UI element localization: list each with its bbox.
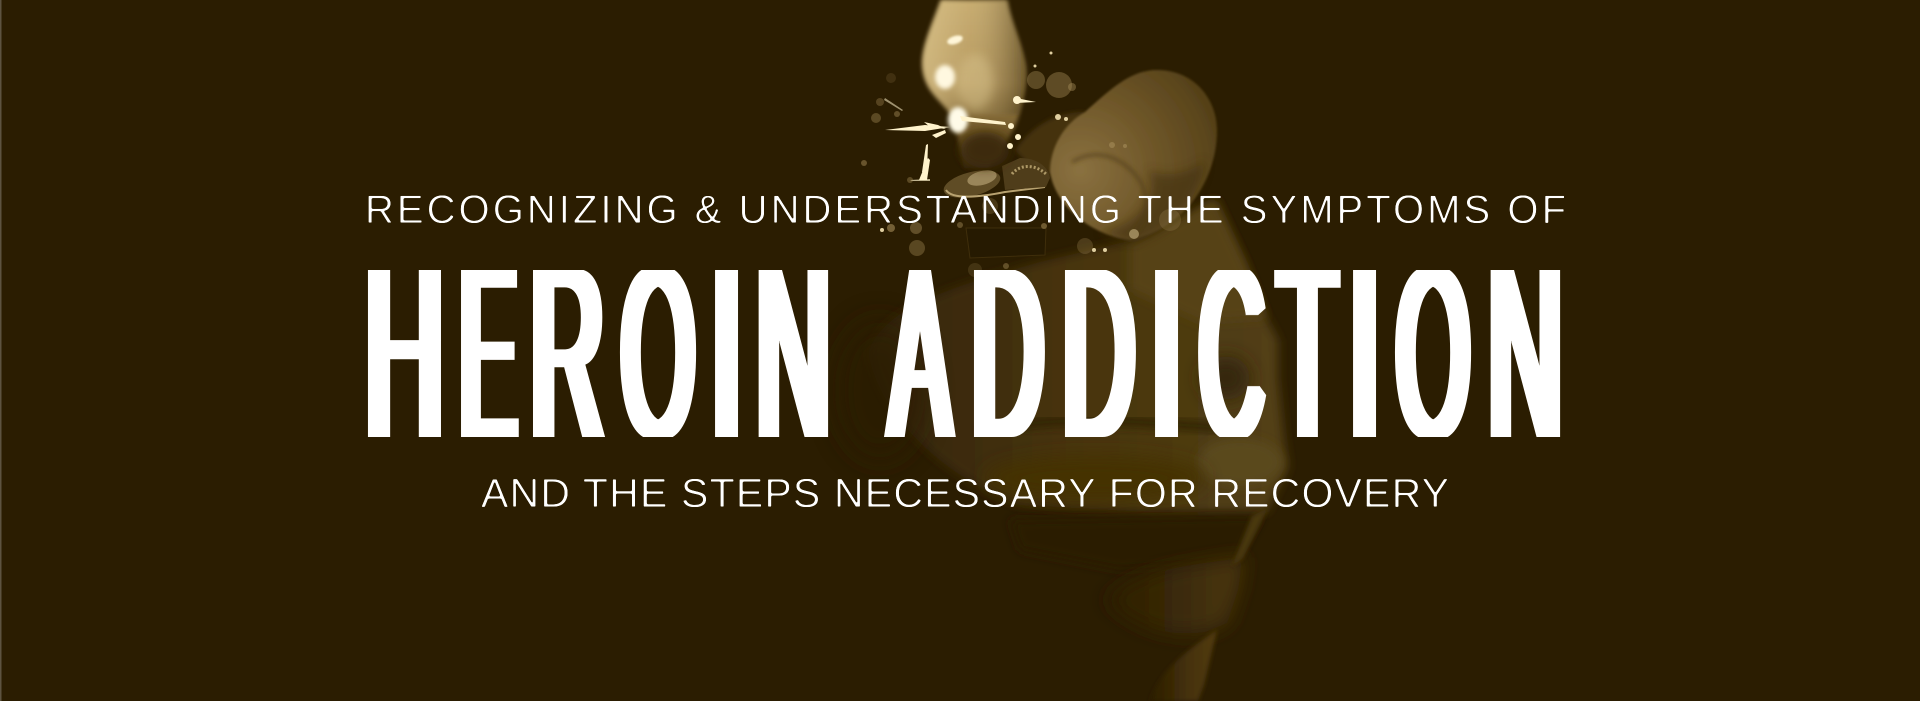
lighter wheel [1002,158,1050,190]
lighter inner [966,168,998,188]
neck shape [1150,630,1217,701]
title: D [972,216,1044,489]
shadow under fist [1010,516,1262,570]
hot spot mid [935,65,955,89]
title: I [1150,216,1183,489]
left fade [835,320,925,460]
flame mid glow [957,54,993,110]
sparks [884,96,1036,181]
flame body [923,0,1026,168]
lower knuckle highlight [1198,438,1282,486]
wheel teeth [1012,166,1046,174]
knuckle shadow [1202,356,1250,400]
title: T [1278,216,1337,489]
title: O [622,216,695,489]
lighter body [966,228,1046,258]
flame [884,0,1036,181]
photo: hand with lighter [835,0,1288,701]
title: A [890,216,950,489]
title: D [1063,216,1135,489]
title: I [710,216,743,489]
subtitle top: RECOGNIZING & UNDERSTANDING THE SYMPTOMS OF [365,188,1566,232]
title: R [531,216,604,489]
lower finger [1130,200,1266,322]
flame side light [923,0,1026,115]
title: C [1200,216,1264,489]
thumb [1050,70,1217,240]
bokeh particles [861,52,1181,277]
fist [868,200,1288,512]
hot spot top [946,34,964,46]
thumbnail crease [1072,155,1146,232]
flame dark core [961,132,1009,168]
hot spot low [948,107,968,133]
lighter head [941,158,1050,203]
lighter rim [946,187,1045,197]
lit edge [1232,508,1268,566]
left edge line [0,0,2,701]
title: O [1396,216,1470,489]
title [368,270,1560,437]
finger fold [980,421,1225,432]
title: N [756,216,830,489]
thumb base [1015,112,1085,175]
thumb lower shadow [1100,160,1205,243]
banner: N [1488,216,1562,489]
lower fist glow [985,456,1205,500]
title: E [460,216,516,489]
lighter cap [941,165,1003,203]
title: I [1348,216,1381,489]
subtitle bottom: AND THE STEPS NECESSARY FOR RECOVERY [481,470,1449,516]
title: H [365,216,444,489]
chin shape [1105,557,1243,633]
